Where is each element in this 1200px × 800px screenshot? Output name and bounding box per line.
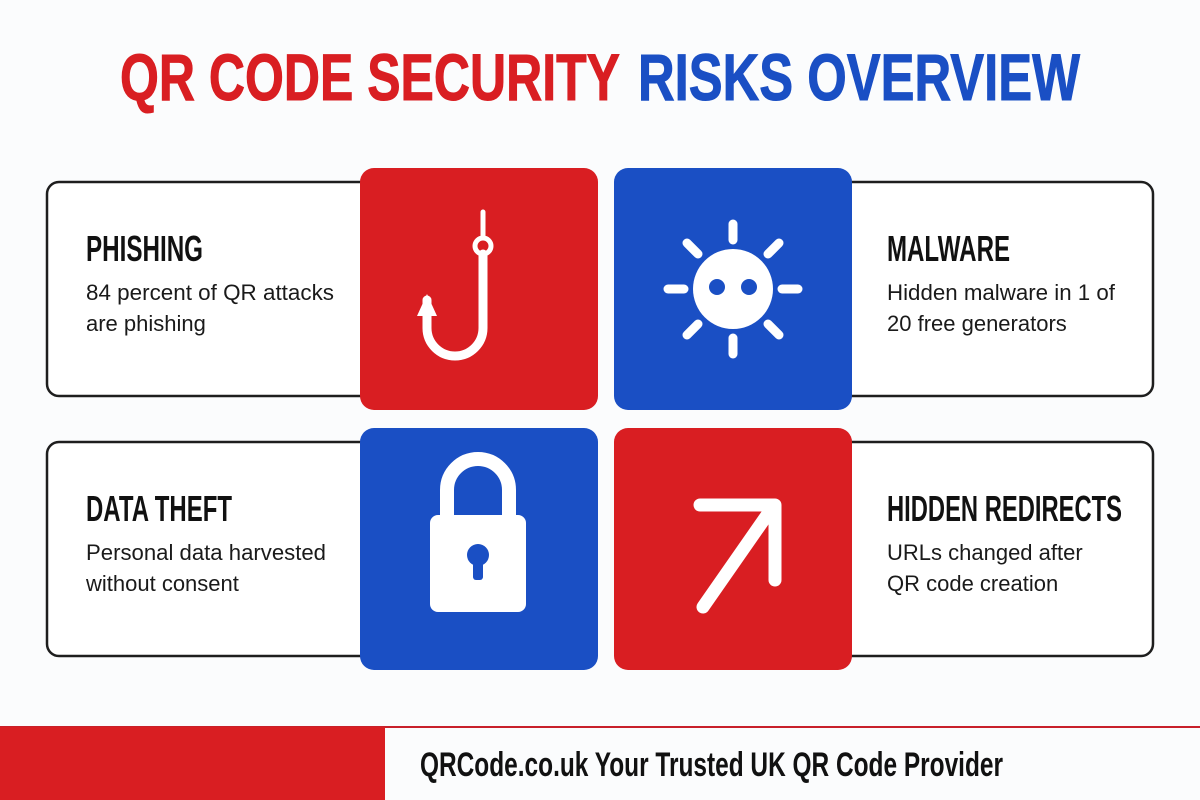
panel: phishing: PHISHING <box>86 228 203 269</box>
title: RISKS OVERVIEW <box>638 40 1081 114</box>
panel: phishing <box>47 182 380 396</box>
panel: data theft: without consent <box>85 571 239 596</box>
panel: hidden redirects: QR code creation <box>887 571 1058 596</box>
title <box>120 40 1081 114</box>
icon: malware bug <box>614 168 852 410</box>
panel: malware <box>830 182 1153 396</box>
panel: malware: Hidden malware in 1 of <box>887 280 1116 305</box>
title: QR CODE SECURITY <box>120 40 620 114</box>
panel: hidden redirects <box>830 442 1153 656</box>
panel: data theft <box>47 442 380 656</box>
panel: phishing: are phishing <box>86 311 206 336</box>
icon: redirect arrow <box>614 428 852 670</box>
panel: phishing: 84 percent of QR attacks <box>86 280 334 305</box>
icon: fish hook <box>360 168 598 410</box>
panel: data theft: DATA THEFT <box>86 488 232 529</box>
panel: data theft: Personal data harvested <box>86 540 326 565</box>
footer <box>0 727 1200 800</box>
icon: padlock <box>360 428 598 670</box>
panel: malware: 20 free generators <box>887 311 1067 336</box>
panel: hidden redirects: URLs changed after <box>887 540 1083 565</box>
panel: malware: MALWARE <box>887 228 1010 269</box>
